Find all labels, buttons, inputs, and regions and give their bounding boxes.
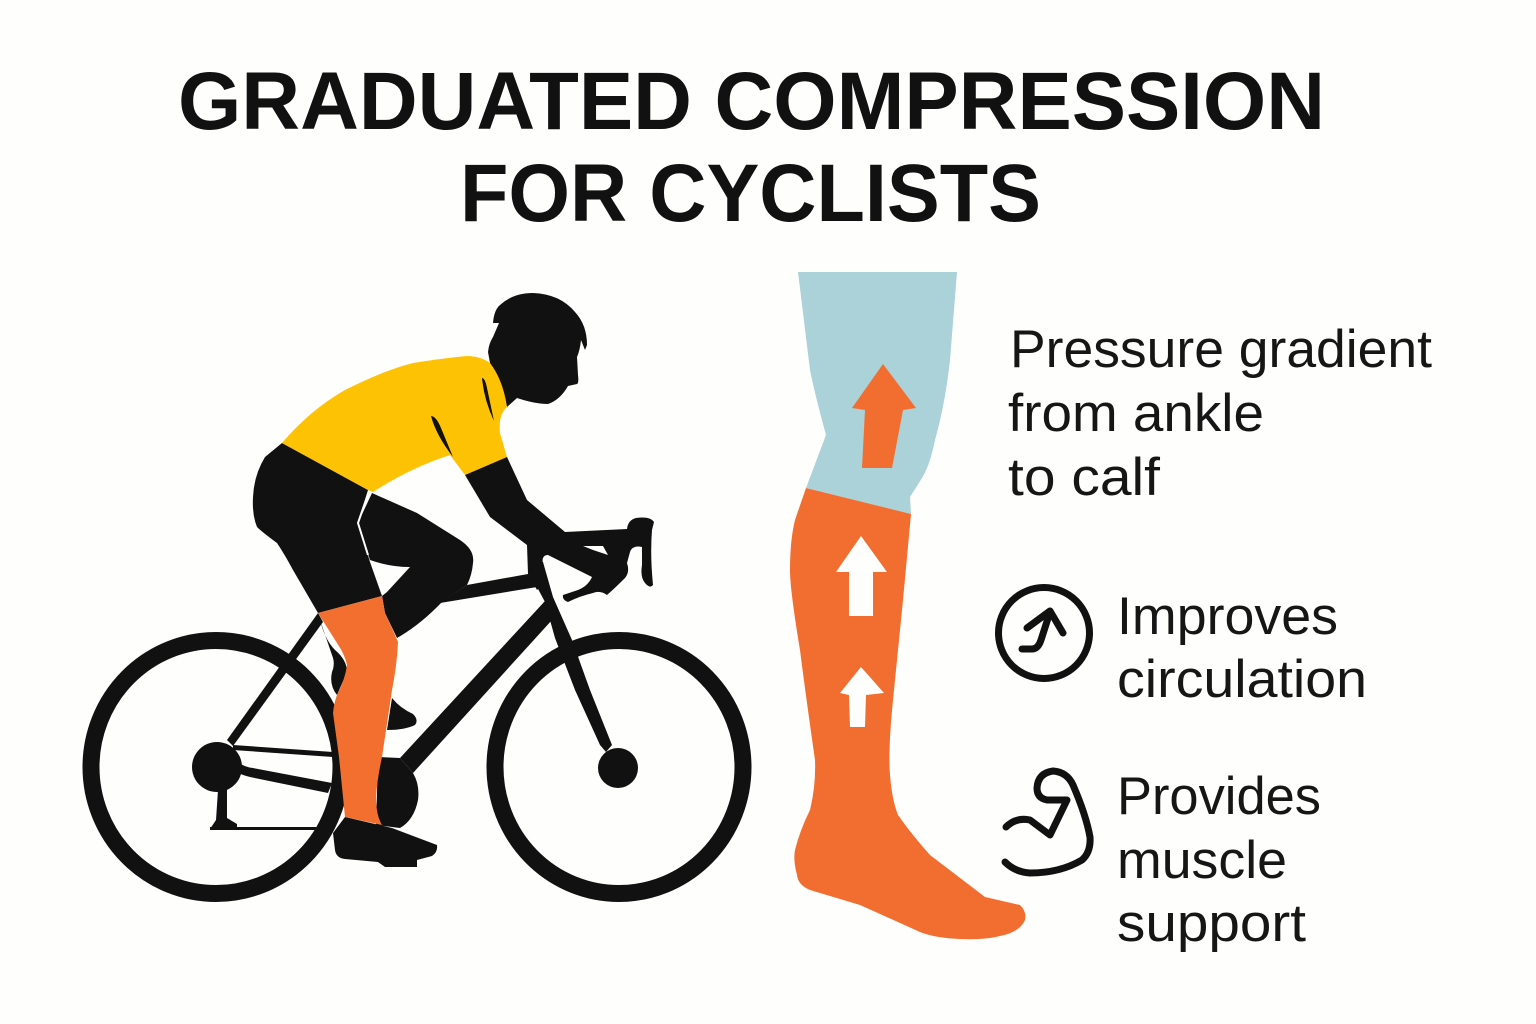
- icon: flexed muscle: [1005, 771, 1090, 873]
- text: pressure gradient: Pressure gradient: [1010, 320, 1432, 379]
- text: provides muscle support: [1117, 767, 1321, 953]
- text: provides muscle support: muscle: [1117, 831, 1287, 890]
- text: pressure gradient: to calf: [1008, 448, 1160, 507]
- compression sock: [790, 488, 1025, 939]
- compression sleeve on cyclist: [318, 596, 398, 825]
- title: FOR CYCLISTS: [460, 148, 1041, 239]
- rear wheel: [91, 640, 341, 894]
- icon: circulation arrow: [998, 588, 1090, 678]
- text: provides muscle support: support: [1117, 894, 1306, 953]
- title: GRADUATED COMPRESSION: [178, 56, 1325, 147]
- shorts and thigh: [253, 443, 382, 613]
- bike frame: [192, 560, 638, 830]
- text: pressure gradient: from ankle: [1008, 384, 1264, 443]
- arrow: white up, lower: [840, 667, 884, 727]
- yellow jersey: [282, 356, 507, 492]
- arrow: orange up: [852, 364, 916, 468]
- front wheel: [495, 640, 743, 894]
- jersey creases: [431, 378, 494, 457]
- arrow: white up, upper: [836, 536, 887, 616]
- illustration: cyclist on road bike: [91, 293, 743, 894]
- text: improves circulation: circulation: [1117, 650, 1367, 709]
- text: pressure gradient: [1008, 320, 1432, 507]
- shoe: [333, 817, 437, 867]
- text: improves circulation: Improves: [1117, 587, 1338, 646]
- back leg and foot: [320, 620, 417, 730]
- text: improves circulation: [1117, 587, 1367, 709]
- head: [488, 293, 587, 407]
- text: provides muscle support: Provides: [1117, 767, 1321, 826]
- arm, hand and handlebar: [465, 457, 654, 602]
- illustration: leg with graduated compression: [790, 272, 1025, 939]
- upper leg: [798, 272, 957, 514]
- title: [178, 56, 1325, 239]
